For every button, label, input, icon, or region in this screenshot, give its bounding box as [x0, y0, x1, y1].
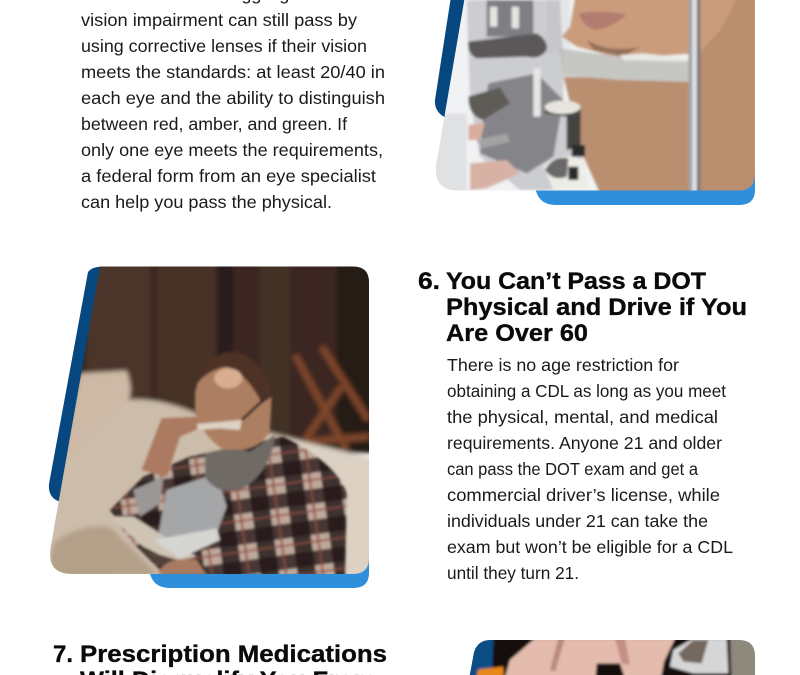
- accent: blue base, eye exam photo: [536, 170, 755, 205]
- body text: item 5 continued: meets the standards: at least 20/40 in: [81, 62, 385, 82]
- heading: item 7: [53, 641, 387, 675]
- body text: item 5 continued: only one eye meets the requirements,: [81, 140, 383, 160]
- accent: navy strip, reading photo: [49, 266, 112, 501]
- photo panel: eye exam: [420, 0, 757, 205]
- body text: item 6: [447, 355, 733, 583]
- body text: item 6: commercial driver’s license, while: [447, 485, 720, 505]
- body text: item 5 continued: can help you pass the physical.: [81, 192, 332, 212]
- body text: item 6: exam but won’t be eligible for a CDL: [447, 537, 733, 557]
- body text: item 5 continued: [81, 0, 385, 212]
- photo: man at slit lamp: [420, 0, 757, 193]
- body text: item 6: until they turn 21.: [447, 563, 579, 583]
- body text: item 5 continued: vision impairment can still pass by: [81, 10, 357, 30]
- heading: item 6: 6.: [418, 268, 440, 295]
- body text: item 6: obtaining a CDL as long as you meet: [447, 381, 726, 401]
- heading: item 6: You Can’t Pass a DOT: [446, 268, 706, 295]
- body text: item 6: the physical, mental, and medical: [447, 407, 718, 427]
- body text: item 6: can pass the DOT exam and get a: [447, 459, 698, 479]
- heading: item 6: Physical and Drive if You: [446, 294, 747, 321]
- body text: item 6: There is no age restriction for: [447, 355, 679, 375]
- photo: bearded man with glasses: [50, 266, 369, 574]
- photo panel: hands with medication: [470, 640, 755, 675]
- photo panel: man reading: [30, 260, 377, 588]
- heading: item 7: 7.: [53, 641, 73, 668]
- heading: item 6: [418, 268, 747, 347]
- body text: item 6: individuals under 21 can take the: [447, 511, 708, 531]
- body text: item 6: requirements. Anyone 21 and older: [447, 433, 722, 453]
- body text: item 5 continued: each eye and the ability to distinguish: [81, 88, 385, 108]
- heading: item 7: Prescription Medications: [80, 641, 387, 668]
- heading: item 6: Are Over 60: [446, 320, 588, 347]
- body text: item 5 continued: between red, amber, and green. If: [81, 114, 347, 134]
- body text: item 5 continued: a federal form from an eye specialist: [81, 166, 376, 186]
- accent: blue base, reading photo: [150, 550, 369, 588]
- accent: navy strip, eye exam photo: [435, 0, 480, 118]
- body text: item 5 continued: using corrective lenses if their vision: [81, 36, 367, 56]
